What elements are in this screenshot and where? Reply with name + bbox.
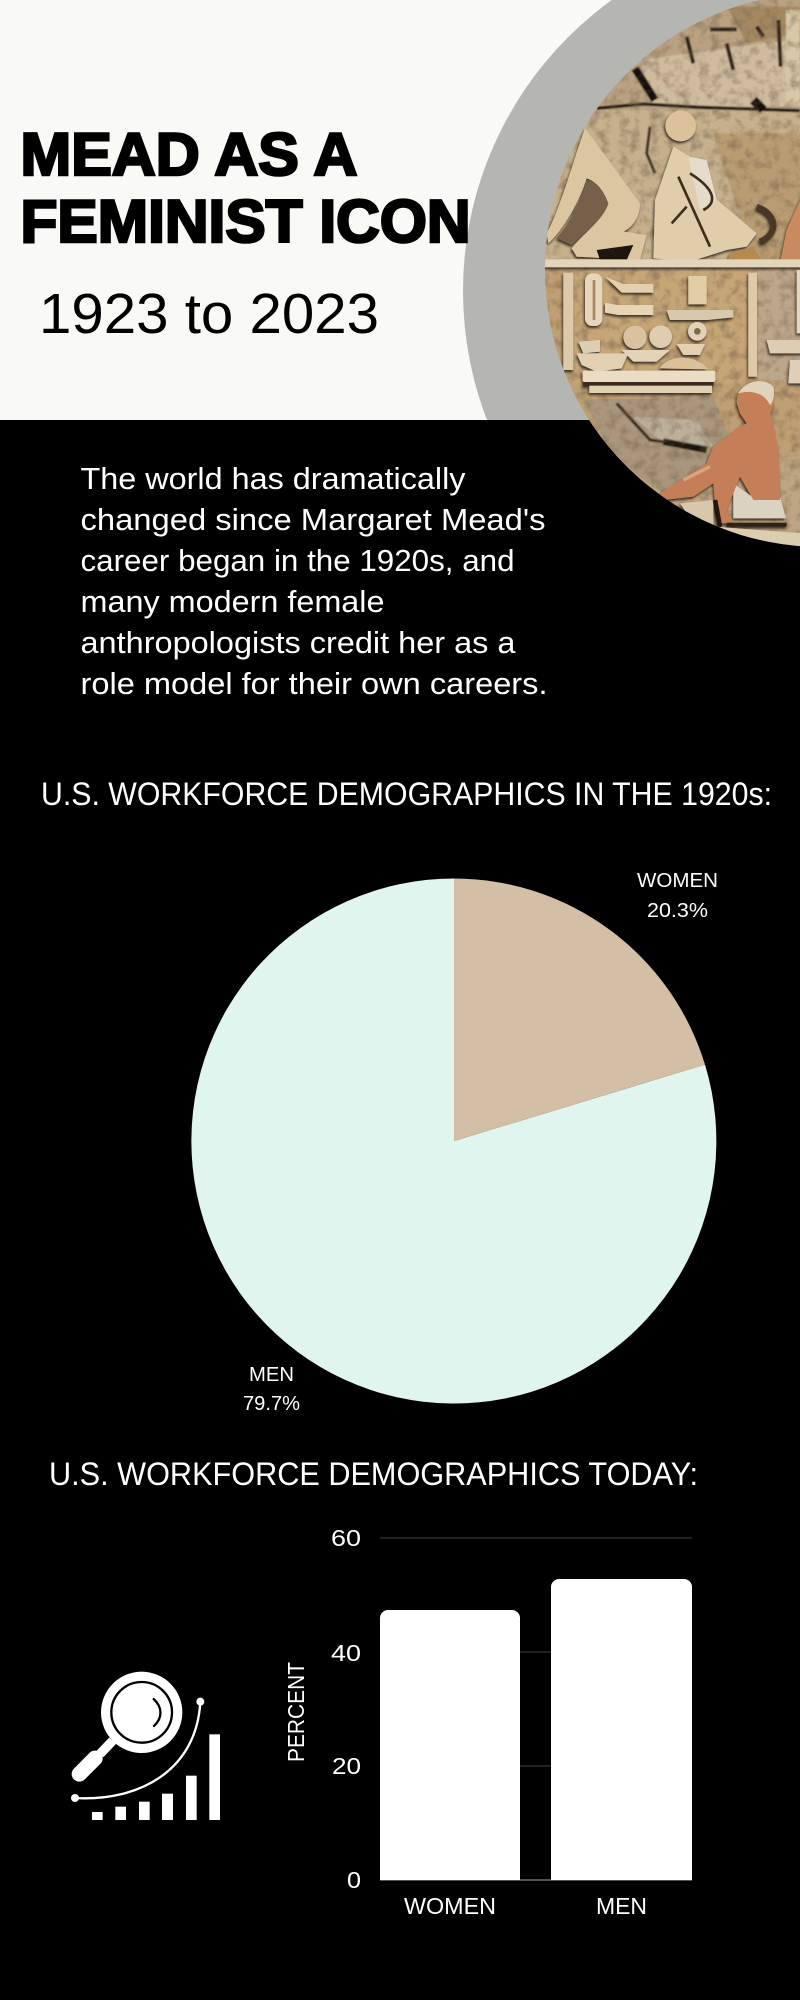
pie label: women: WOMEN	[637, 870, 718, 892]
offerings	[585, 273, 602, 326]
bar: women	[380, 1610, 520, 1880]
y axis ticks	[331, 1525, 361, 1893]
pie label: women: 20.3%	[647, 900, 708, 922]
left kneeling figure	[547, 128, 647, 260]
intro paragraph: many modern female	[80, 584, 384, 619]
centre seated figure	[665, 111, 696, 141]
pie label: men: MEN	[249, 1364, 294, 1386]
title	[20, 121, 470, 255]
intro paragraph: career began in the 1920s, and	[80, 543, 514, 578]
x axis labels: WOMEN	[404, 1893, 496, 1919]
vertical bars	[563, 273, 573, 370]
intro paragraph: changed since Margaret Mead's	[80, 502, 546, 537]
intro paragraph: The world has dramatically	[80, 461, 466, 496]
heading: 1920s demographics: U.S. WORKFORCE DEMOGRAPHICS IN THE 1920s:	[41, 776, 772, 812]
header panel	[0, 0, 760, 420]
plowing figure	[680, 500, 713, 527]
title: MEAD AS A	[20, 121, 358, 188]
y axis ticks: 20	[332, 1753, 361, 1779]
x axis labels: MEN	[596, 1893, 647, 1919]
intro paragraph: anthropologists credit her as a	[80, 625, 516, 660]
pie label: women	[637, 870, 718, 922]
x axis labels	[404, 1893, 647, 1919]
pie chart: 1920s workforce	[191, 870, 718, 1415]
y axis ticks: 40	[331, 1640, 361, 1666]
intro paragraph	[80, 461, 548, 701]
subtitle: date range: 1923 to 2023	[39, 282, 379, 346]
image: Egyptian relief in circle	[540, 0, 800, 560]
pie label: men: 79.7%	[243, 1393, 300, 1415]
pie slice: men	[191, 878, 716, 1403]
pie label: men	[243, 1364, 300, 1415]
y axis title: PERCENT	[283, 1662, 309, 1762]
y axis ticks: 60	[331, 1525, 361, 1551]
grey circle backdrop	[463, 0, 760, 420]
title: FEMINIST ICON	[20, 188, 470, 255]
pie slice: women	[454, 878, 705, 1141]
bar chart: workforce today	[283, 1525, 692, 1919]
bar: men	[551, 1579, 692, 1880]
icon: magnifying glass over rising bars	[71, 1672, 220, 1820]
y axis ticks: 0	[347, 1867, 361, 1893]
heading: today demographics: U.S. WORKFORCE DEMOGRAPHICS TODAY:	[49, 1456, 698, 1492]
orange figure edge	[780, 193, 800, 263]
intro paragraph: role model for their own careers.	[80, 666, 548, 701]
band	[540, 259, 800, 267]
